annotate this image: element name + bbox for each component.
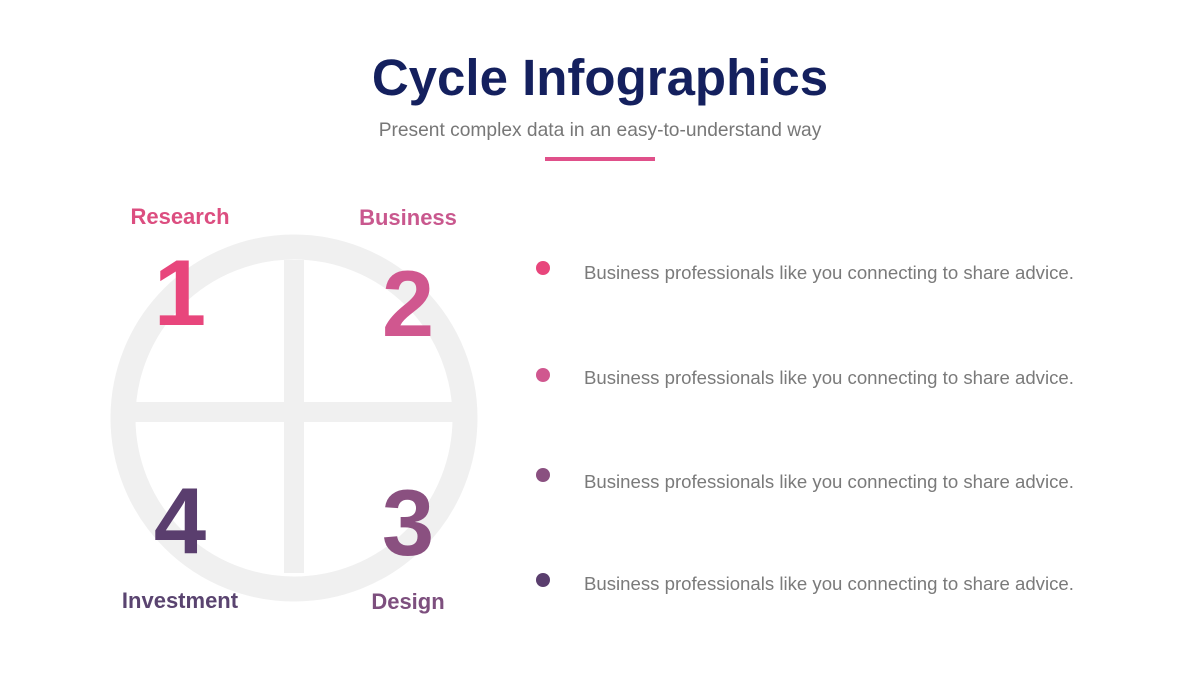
bullet 1: [536, 261, 550, 275]
number 1: 1: [154, 240, 206, 345]
bullet 2: [536, 368, 550, 382]
label: Design: Design: [371, 589, 445, 614]
title: Cycle Infographics: [372, 49, 828, 106]
label: Investment: Investment: [122, 588, 238, 613]
number 2: 2: [382, 251, 434, 356]
accent underline: [545, 157, 655, 161]
label: Research: Research: [130, 204, 230, 229]
text 1: Business professionals like you connecting to share advice.: [584, 262, 1074, 283]
number 4: 4: [154, 468, 206, 573]
text 4: Business professionals like you connecting to share advice.: [584, 573, 1074, 594]
text 2: Business professionals like you connecting to share advice.: [584, 367, 1074, 388]
bullet 4: [536, 573, 550, 587]
label: Business: Business: [359, 205, 457, 230]
text 3: Business professionals like you connecting to share advice.: [584, 471, 1074, 492]
bullet 3: [536, 468, 550, 482]
subtitle: Present complex data in an easy-to-understand way: [379, 120, 821, 141]
number 3: 3: [382, 470, 434, 575]
